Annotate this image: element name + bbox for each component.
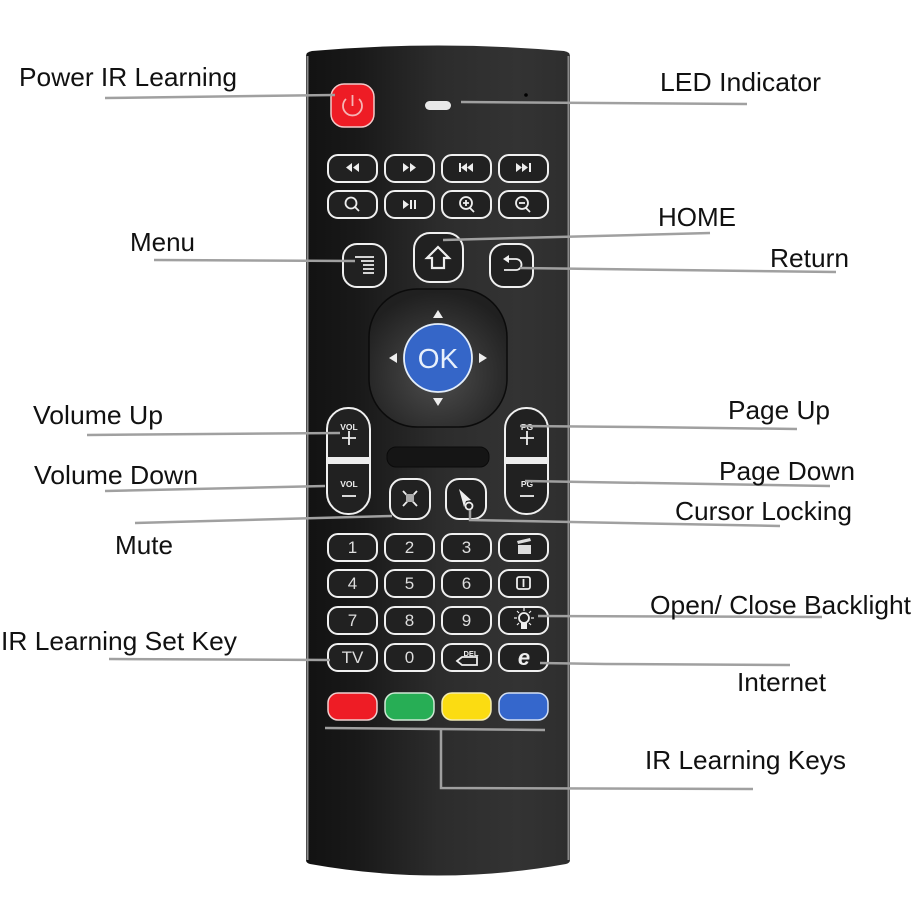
number keypad: 3 — [462, 538, 471, 557]
number keypad: 1 — [348, 538, 357, 557]
label: IR Learning Set Key: IR Learning Set Key — [1, 626, 237, 656]
rocker: page: PG — [521, 422, 534, 432]
label: IR Learning Keys: IR Learning Keys — [645, 745, 846, 775]
rocker: volume: VOL — [340, 479, 358, 489]
rocker: volume — [327, 408, 370, 514]
number keypad: 7 — [348, 611, 357, 630]
button: home — [414, 233, 463, 282]
label: Return: Return — [770, 243, 849, 273]
button: power — [331, 84, 374, 127]
number keypad: 6 — [462, 574, 471, 593]
media key row 2 — [328, 191, 548, 218]
panel: remote body — [306, 46, 570, 876]
label: Page Up: Page Up — [728, 395, 830, 425]
number keypad — [328, 534, 548, 671]
label: Cursor Locking: Cursor Locking — [675, 496, 852, 526]
directional pad with OK — [369, 289, 507, 427]
button: menu — [343, 244, 386, 287]
colour keys — [328, 693, 548, 720]
media key row 1 — [328, 155, 548, 182]
number keypad: 2 — [405, 538, 414, 557]
number keypad: DEL — [464, 649, 479, 658]
LED indicator — [425, 93, 528, 110]
number keypad: 0 — [405, 648, 414, 667]
label: Page Down: Page Down — [719, 456, 855, 486]
number keypad: 5 — [405, 574, 414, 593]
number keypad: 4 — [348, 574, 357, 593]
label: Internet: Internet — [737, 667, 827, 697]
label: HOME: HOME — [658, 202, 736, 232]
label: LED Indicator: LED Indicator — [660, 67, 821, 97]
label: Open/ Close Backlight: Open/ Close Backlight — [650, 590, 912, 620]
label: Menu: Menu — [130, 227, 195, 257]
label: Volume Down: Volume Down — [34, 460, 198, 490]
label: Mute: Mute — [115, 530, 173, 560]
rocker: page: PG — [521, 479, 534, 489]
number keypad: 9 — [462, 611, 471, 630]
rocker: volume: VOL — [340, 422, 358, 432]
button: backlight bulb — [499, 607, 548, 634]
label: Power IR Learning: Power IR Learning — [19, 62, 237, 92]
speaker slot — [387, 447, 489, 467]
rocker: page — [505, 408, 548, 514]
label: Volume Up: Volume Up — [33, 400, 163, 430]
number keypad: TV — [342, 648, 364, 667]
number keypad: 8 — [405, 611, 414, 630]
button: mute — [390, 479, 430, 519]
button: return — [490, 244, 533, 287]
button: OK: OK — [418, 343, 459, 374]
button: cursor lock — [446, 479, 486, 519]
button: internet: e — [518, 645, 530, 670]
button: internet — [499, 644, 548, 671]
leader lines — [87, 95, 836, 789]
